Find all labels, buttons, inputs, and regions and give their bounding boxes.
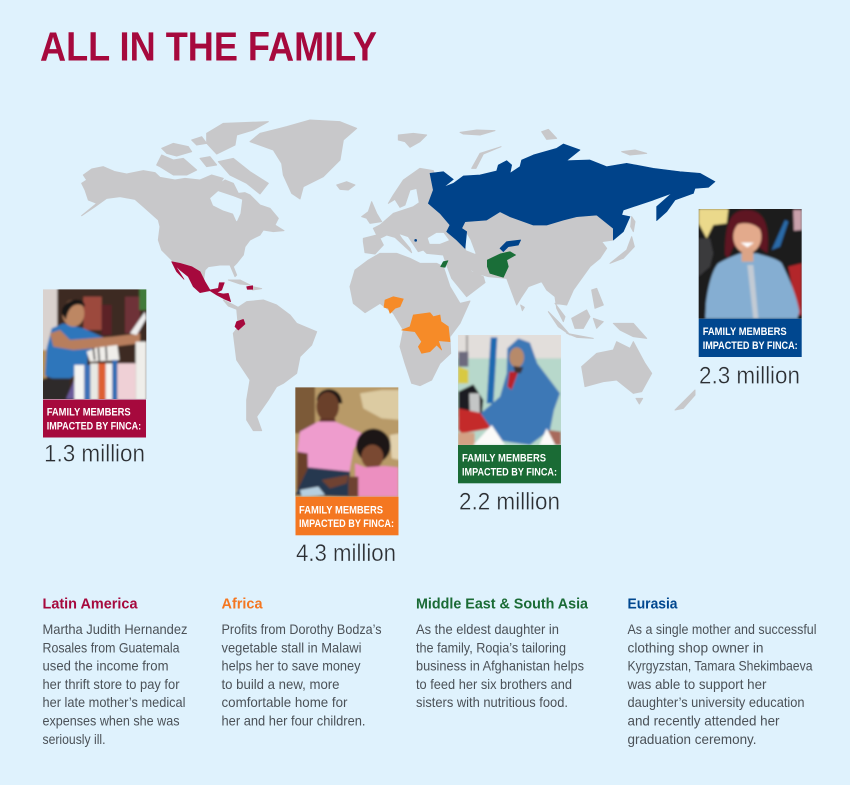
text block: Latin America [42,597,188,747]
story: Tamara [627,621,816,747]
story: Dorothy: vegetable stall in Malawi [222,639,362,655]
story: Martha: Rosales from Guatemala [42,639,180,655]
story: Roqia [416,621,584,710]
map: Middle East and South Asia highlighted countries [441,252,516,277]
story: Martha: seriously ill. [42,731,106,747]
panel: Eurasia photo card [698,209,802,384]
world map [82,120,715,431]
story: Martha: her thrift store to pay for [42,676,180,692]
story: Roqia: sisters with nutritious food. [416,694,568,710]
story: Roqia: to feed her six brothers and [416,676,572,692]
story: Roqia: the family, Roqia’s tailoring [416,639,566,655]
heading: Eurasia: Eurasia [628,597,678,613]
banner text: Africa [299,504,394,530]
panel: Middle East and South Asia photo card [458,335,561,510]
map: Eurasia highlighted countries [415,144,715,252]
banner: Middle East and South Asia [458,445,561,483]
story: Dorothy: her and her four children. [222,712,366,728]
banner text: Africa: FAMILY MEMBERS [299,504,383,516]
figure: 2.2 million: 2.2 million [459,488,560,515]
map: Africa highlighted countries [384,297,450,353]
map: Latin America highlighted countries [172,262,253,330]
heading: Middle East and South Asia: Middle East & South Asia [416,597,589,613]
story: Tamara: clothing shop owner in [628,639,764,655]
banner text: Middle East and South Asia: FAMILY MEMBERS [462,452,546,464]
title: ALL IN THE FAMILY [40,24,377,70]
panel: Latin America photo card [43,289,146,462]
banner text: Eurasia [703,326,798,352]
photo: Roqia at her sewing machine [458,335,561,445]
heading: Africa: Africa [222,597,263,613]
story: Tamara: daughter’s university education [628,694,804,710]
story: Martha [42,621,188,747]
story: Tamara: Kyrgyzstan, Tamara Shekimbaeva [628,658,813,674]
photo: Martha at her thrift store [40,287,150,402]
story: Roqia: As the eldest daughter in [416,621,559,637]
text block: Eurasia [627,597,816,747]
story: Martha: Martha Judith Hernandez [42,621,188,637]
story: Martha: her late mother’s medical [42,694,186,710]
figure: 4.3 million: 4.3 million [296,540,396,567]
photo: Tamara in her clothing shop [698,209,802,319]
banner text: Eurasia: FAMILY MEMBERS [703,326,787,338]
panel: Africa photo card [295,387,398,561]
banner text: Eurasia: IMPACTED BY FINCA: [703,340,798,352]
banner text: Middle East and South Asia: IMPACTED BY FINCA: [462,466,557,478]
banner text: Latin America: IMPACTED BY FINCA: [47,420,141,432]
story: Dorothy: to build a new, more [222,676,340,692]
story: Tamara: and recently attended her [628,712,780,728]
story: Martha: expenses when she was [42,712,180,728]
banner text: Middle East and South Asia [462,452,557,478]
story: Tamara: was able to support her [627,676,767,692]
banner: Latin America [43,400,146,438]
banner text: Latin America [47,406,141,432]
text block: Africa [222,597,382,728]
banner text: Africa: IMPACTED BY FINCA: [299,518,394,530]
story: Dorothy: comfortable home for [222,694,348,710]
photo: Dorothy and her child [295,387,398,497]
banner text: Latin America: FAMILY MEMBERS [47,406,131,418]
map: Europe, Africa, Asia, Oceania [350,129,715,410]
map: Americas [82,120,357,431]
story: Dorothy [222,621,382,728]
banner: Eurasia [699,319,802,357]
heading: Latin America: Latin America [42,597,138,613]
figure: 2.3 million: 2.3 million [699,362,800,389]
text block: Middle East and South Asia [416,597,589,710]
story: Dorothy: Profits from Dorothy Bodza’s [222,621,382,637]
story: Dorothy: helps her to save money [222,658,360,674]
story: Tamara: graduation ceremony. [628,731,756,747]
banner: Africa [296,497,398,535]
story: Tamara: As a single mother and successful [628,621,816,637]
story: Martha: used the income from [42,658,168,674]
figure: 1.3 million: 1.3 million [44,440,145,468]
story: Roqia: business in Afghanistan helps [416,658,584,674]
